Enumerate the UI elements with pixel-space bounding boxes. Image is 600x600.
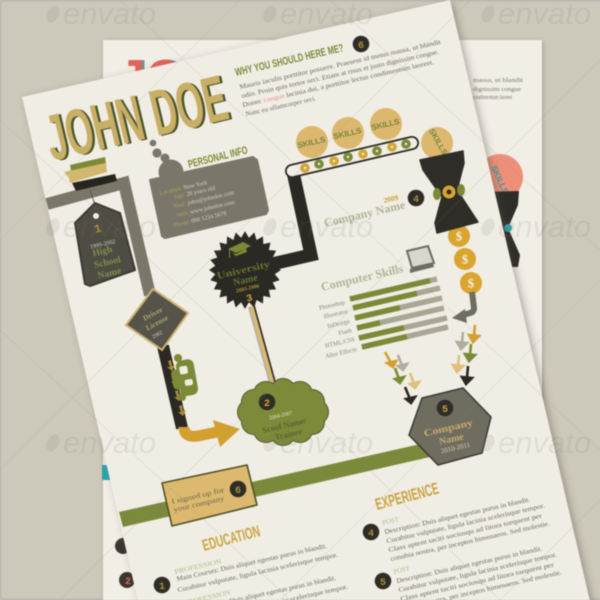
hexagon text [423, 418, 474, 455]
back sheet skills circle: SKILLS [489, 164, 511, 196]
section: experience item 4 [363, 496, 551, 563]
watermarks: envato: envato [280, 209, 373, 244]
back sheet text [473, 77, 523, 101]
job 4: company name: 2009 [382, 193, 399, 205]
green timeline stripe [119, 443, 430, 527]
university text: 2003-2006 [235, 283, 260, 295]
heading: experience: EXPERIENCE [373, 480, 441, 514]
sign: driver license: 2002 [151, 330, 164, 340]
info rows [159, 180, 236, 229]
section: experience item 4: conubia nostra, per inceptos himenaeos. Sed molestie. [390, 520, 551, 563]
watermarks: envato: envato [498, 209, 591, 244]
info rows: Phone: 000 1234 5678 [173, 211, 227, 229]
section: experience item 4: POST [382, 516, 400, 527]
skills circles: SKILLS [333, 126, 363, 141]
section: experience item 5: Description: Duis aliquet egestas purus in blandit. [396, 545, 543, 585]
bars [350, 279, 448, 347]
section: experience item 4: Description: Duis aliquet egestas purus in blandit. [384, 496, 531, 536]
black route: university to gear band [272, 172, 311, 264]
badge 5: 5 [380, 578, 386, 589]
section: experience item 5: Curabitur vulputate, ligula lacinia scelerisque tempor. [398, 551, 558, 594]
bar labels: HTML/CSS [324, 336, 356, 350]
coins: $ [462, 252, 469, 266]
black route: driver sign to arrow [163, 346, 186, 428]
badge 2: 2 [264, 399, 270, 410]
skills circles: SKILLS [297, 135, 327, 150]
ribbon and hanger [64, 157, 117, 205]
watermarks: envato: envato [63, 209, 156, 244]
falling arrows left group [385, 352, 419, 403]
watermarks: envato: envato [63, 425, 156, 460]
badge 4: 4 [368, 529, 374, 540]
university text: Name [232, 272, 259, 289]
personal info heading: PERSONAL INFO [187, 144, 249, 171]
section: education items: Curabitur vulputate, ligula lacinia scelerisque tempor. [177, 552, 339, 594]
school text [261, 410, 308, 442]
back sheet text: condimentum laoreet [473, 94, 512, 101]
section: education items: PROFESSION [174, 558, 222, 576]
bar labels: Flash [338, 327, 353, 337]
badge 6: 6 [358, 41, 364, 52]
heading: why you should here me: WHY YOU SHOULD HERE ME? [234, 42, 345, 79]
icon: laptop [407, 246, 434, 273]
university text: 3 [245, 294, 254, 306]
back sheet title: JOHN DOE [120, 50, 382, 108]
bow gear [433, 184, 465, 200]
hexagon text: 2010-2011 [440, 441, 472, 455]
heading: computer skills: Computer Skills [320, 261, 405, 294]
note: signed up for your company: I signed up for [171, 486, 226, 506]
info rows: Web: www.johndoe.com [176, 200, 236, 219]
title: JOHN DOE: JOHN DOE [41, 61, 237, 175]
hexagon text: Company [423, 418, 474, 440]
back sheet text: dignissim congue [473, 86, 521, 93]
title: JOHN DOE [38, 61, 237, 175]
tag hole [93, 213, 99, 219]
watermarks: envato: envato [280, 425, 373, 460]
section: education items: Main Courses: Duis aliquet egestas purus in blandit. [176, 543, 328, 583]
badge 5 [375, 573, 391, 589]
badge 5: 5 [442, 405, 448, 416]
tag text: High [92, 245, 114, 259]
job 4: company name: Company Name [323, 197, 407, 230]
badge 1: 1 [93, 222, 103, 237]
stick from university to school [249, 306, 276, 387]
intro text block: Donec congue lacinia dui, a porttitor lectus condimentum laoreet. [242, 59, 435, 109]
falling arrows right group [453, 325, 479, 384]
back sheet text: massa, ut blandit [473, 77, 523, 84]
thought bubbles [150, 140, 184, 184]
sign: driver license: Driver [141, 305, 165, 323]
intro text block: Nunc eu ullamcorper orci. [245, 95, 317, 118]
school text: Trainee [274, 426, 303, 442]
skills circles: SKILLS [427, 127, 450, 157]
watermarks: envato [44, 0, 591, 460]
small gold arrows [167, 360, 186, 416]
job 4: company name [323, 190, 424, 230]
tag text [89, 239, 122, 282]
bar labels: Photoshop [318, 299, 345, 312]
badge 6: 6 [235, 486, 241, 497]
icon: graduation cap [228, 242, 251, 258]
bow tie [420, 151, 478, 233]
back sheet skills circle [477, 154, 523, 200]
tag text: School [93, 255, 122, 271]
gear band [292, 141, 412, 171]
back sheet title: JOHN DOE [118, 50, 380, 108]
school text: Scool Name/ [261, 415, 308, 435]
note: signed up for your company [162, 465, 257, 526]
coins: $ [456, 228, 463, 244]
section: experience item 5 [375, 545, 563, 600]
gray arrow [452, 292, 474, 323]
bar labels: InDesign [327, 318, 350, 330]
hexagon text: Name [438, 431, 465, 448]
watermarks: envato: envato [498, 425, 591, 460]
coins [448, 225, 482, 294]
university text [216, 259, 271, 306]
bar labels: After Effects [325, 346, 358, 360]
back sheet teal stripe [102, 465, 142, 480]
cloud: school [237, 378, 329, 446]
heading: education: EDUCATION [201, 523, 262, 555]
back sheet bow [480, 191, 520, 267]
skills circles [296, 108, 453, 159]
icon: green car [170, 354, 199, 401]
school text: 2004-2007 [268, 410, 293, 422]
back sheet item badges [115, 538, 135, 588]
section: education items [154, 543, 349, 600]
bar labels: Illustrator [323, 308, 348, 320]
section: experience item 4: Curabitur vulputate, ligula lacinia scelerisque tempor. [386, 502, 546, 545]
back sheet item badges: 2 [125, 577, 131, 588]
skills circles: SKILLS [371, 117, 401, 132]
badge 1 [154, 577, 170, 593]
road: grey route from start to driver sign [47, 183, 150, 295]
back sheet of the resume [102, 40, 542, 600]
info rows: Mail: john@johndoe.com [173, 190, 235, 210]
hexagon: company name [409, 388, 491, 465]
badge 4 [363, 524, 379, 540]
badge: university [209, 231, 281, 309]
bar chart: computer skills [318, 279, 448, 360]
note: signed up for your company: your company [173, 494, 226, 514]
university text: University [216, 259, 271, 282]
gears [302, 141, 409, 171]
badge 1: 1 [159, 582, 165, 593]
bar labels [318, 299, 358, 360]
section: experience item 5: POST [393, 565, 411, 576]
info rows: Location: New York [159, 180, 208, 197]
intro text block: Mauris iaculis porttitor posuere. Praesent id metus massa, ut blandit [239, 39, 442, 91]
info panel body [150, 157, 268, 238]
tag text: 1999-2002 [89, 239, 116, 251]
title: JOHN DOE: JOHN DOE [38, 61, 234, 175]
panel: personal info [150, 140, 268, 238]
intro text block [239, 39, 442, 118]
coins: $ [468, 276, 475, 290]
info rows: Age: 28 years old [173, 186, 216, 201]
tag text: Name [97, 267, 122, 282]
sign: driver license: License [144, 313, 170, 332]
badge 4: 4 [413, 195, 419, 206]
section: experience item 4: Class aptent taciti sociosqu ad litora torquent per [388, 512, 544, 554]
sign: driver license [126, 289, 188, 350]
intro text block: odio. Proin quis tortor orci. Etiam at risus et justo dignissim congue. [241, 49, 440, 100]
tag: high school [75, 203, 135, 286]
arrow: gold to school [184, 420, 240, 447]
